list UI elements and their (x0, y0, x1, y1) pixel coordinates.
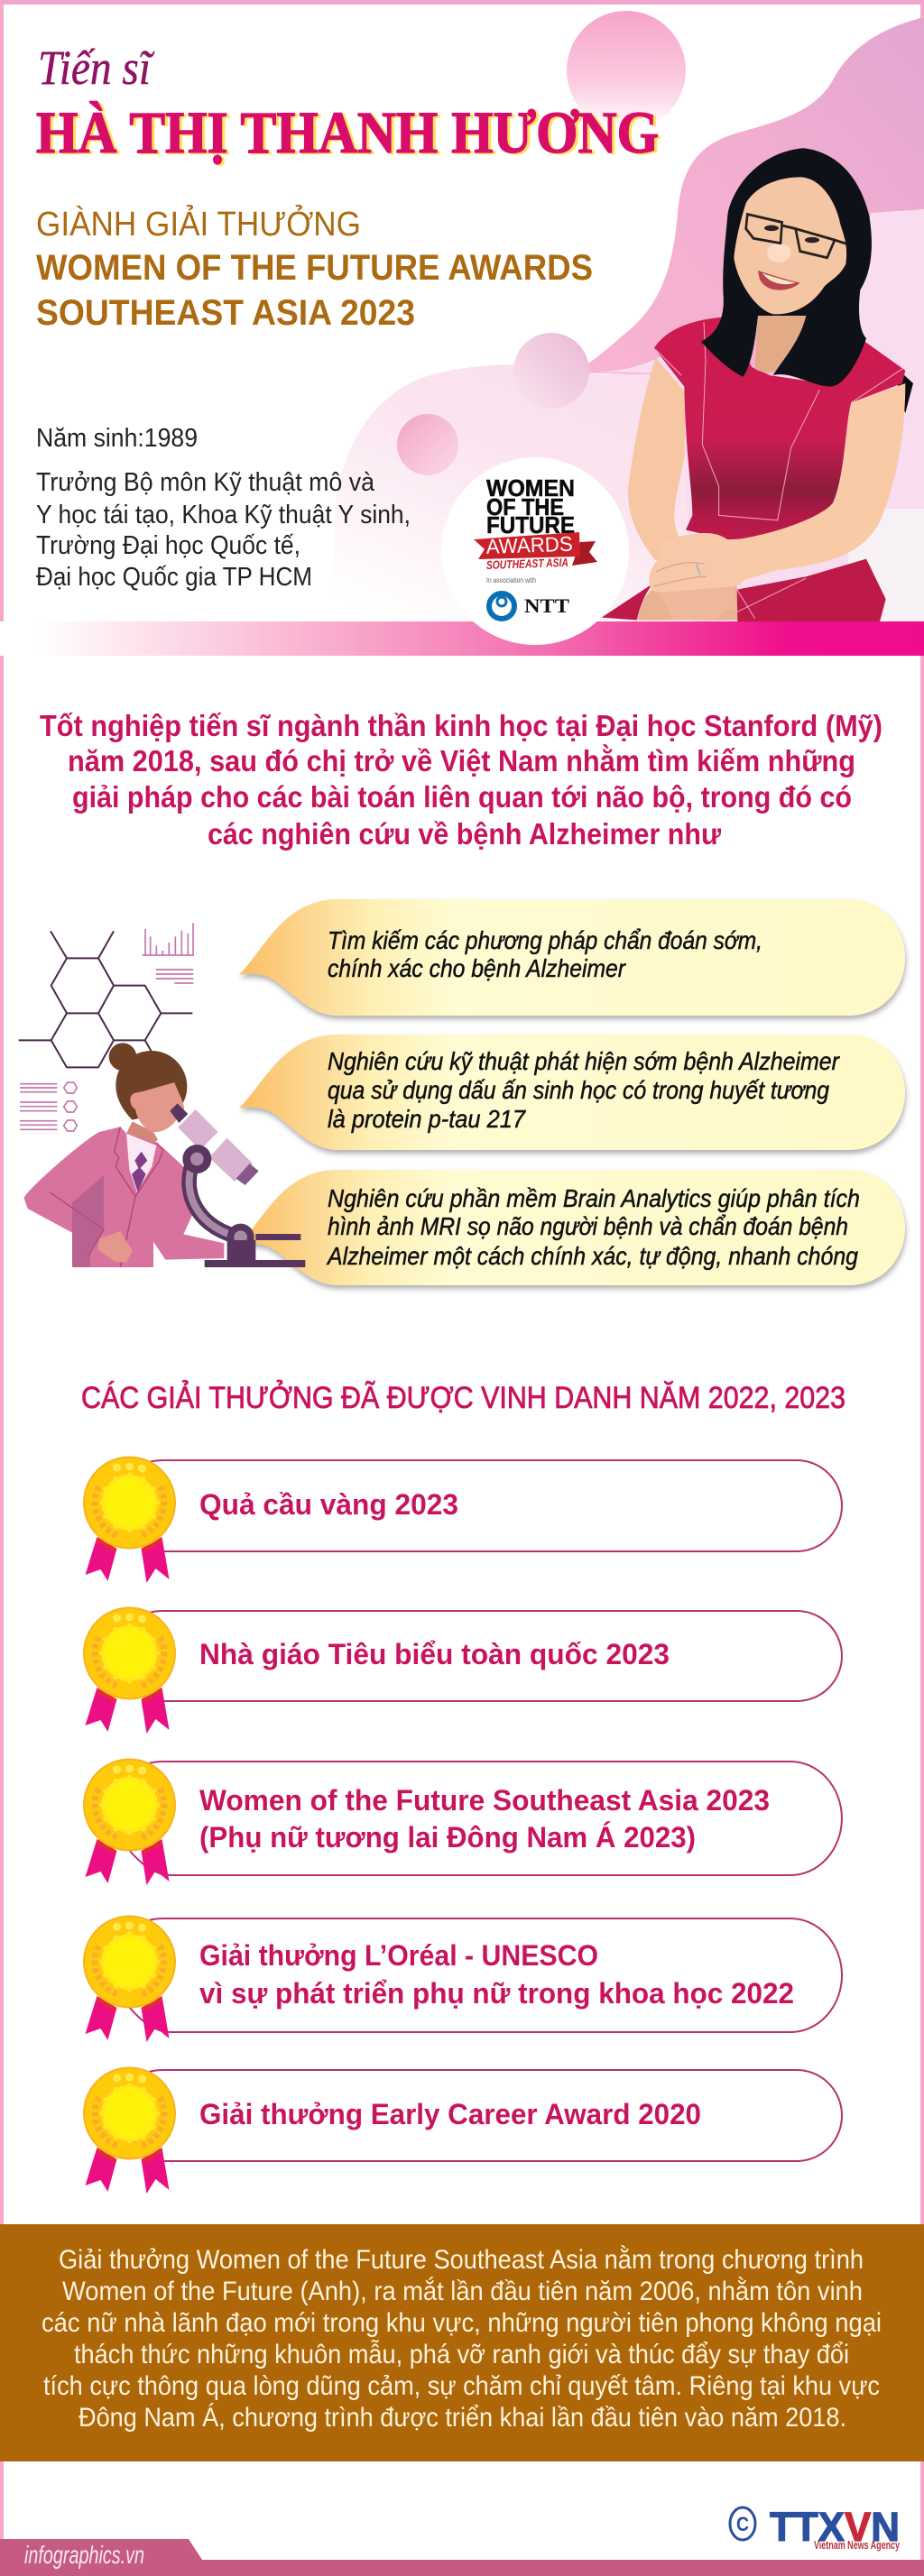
biography text: Trường Đại học Quốc tế, (36, 531, 300, 560)
biography text: Trưởng Bộ môn Kỹ thuật mô và (36, 468, 375, 497)
panel: about the award: Đông Nam Á, chương trình được triển khai lần đầu tiên vào năm 2018. (79, 2403, 846, 2433)
callout 3: Alzheimer một cách chính xác, tự động, nhanh chóng (326, 1242, 858, 1270)
logo: Women of the Future Awards (441, 457, 629, 645)
callout 2 (239, 1035, 905, 1150)
footer band (0, 2539, 924, 2576)
award 2 (83, 1607, 842, 1734)
intro text: các nghiên cứu về bệnh Alzheimer như (208, 817, 721, 851)
panel: about the award: Women of the Future (Anh), ra mắt lần đầu tiên năm 2006, nhằm tôn vinh (62, 2277, 863, 2306)
photo: Dr Ha Thi Thanh Huong (602, 148, 913, 621)
heading: award name: WOMEN OF THE FUTURE AWARDS (36, 248, 593, 288)
logo: Women of the Future Awards: AWARDS (485, 532, 573, 558)
panel: research callouts (239, 899, 905, 1285)
intro text: Tốt nghiệp tiến sĩ ngành thần kinh học tại Đại học Stanford (Mỹ) (40, 709, 882, 742)
background blobs (330, 11, 924, 631)
biography text: Đại học Quốc gia TP HCM (36, 563, 312, 592)
intro text: năm 2018, sau đó chị trở về Việt Nam nhằm tìm kiếm những (68, 744, 855, 777)
logo: TTXVN: C (736, 2513, 749, 2535)
award 3 (83, 1759, 842, 1885)
callout 3 (239, 1170, 905, 1285)
callout 2: Nghiên cứu kỹ thuật phát hiện sớm bệnh Alzheimer (328, 1047, 840, 1075)
microscope (170, 1103, 305, 1267)
award 1 (83, 1456, 842, 1583)
icon: mini bar chart (20, 923, 194, 1131)
callout 3: hình ảnh MRI sọ não người bệnh và chẩn đoán bệnh (328, 1212, 848, 1240)
award 3: Women of the Future Southeast Asia 2023 (199, 1784, 770, 1817)
heading: awards: CÁC GIẢI THƯỞNG ĐÃ ĐƯỢC VINH DANH NĂM 2022, 2023 (81, 1381, 845, 1415)
award 4 (83, 1916, 842, 2042)
logo: Women of the Future Awards: NTT (524, 594, 569, 617)
heading: award name: SOUTHEAST ASIA 2023 (36, 293, 415, 333)
award 1: Quả cầu vàng 2023 (199, 1488, 458, 1521)
heading: award name: GIÀNH GIẢI THƯỞNG (36, 204, 361, 244)
logo: Women of the Future Awards: FUTURE (486, 511, 575, 538)
award 4: Giải thưởng L’Oréal - UNESCO (199, 1939, 598, 1972)
logo: Women of the Future Awards: In association with (486, 576, 536, 584)
bottom gradient band (0, 621, 924, 656)
biography text (36, 424, 411, 592)
source: infographics.vn: infographics.vn (24, 2541, 144, 2569)
intro text: giải pháp cho các bài toán liên quan tới não bộ, trong đó có (72, 780, 852, 814)
award 5 (83, 2067, 842, 2194)
logo: Women of the Future Awards: SOUTHEAST ASIA (486, 556, 568, 572)
scientist figure (24, 1043, 224, 1267)
panel: about the award: Giải thưởng Women of the Future Southeast Asia nằm trong chương trình (59, 2245, 864, 2275)
award 3: (Phụ nữ tương lai Đông Nam Á 2023) (199, 1821, 696, 1854)
logo: TTXVN: TTXVN (770, 2504, 900, 2550)
award 2: Nhà giáo Tiêu biểu toàn quốc 2023 (199, 1638, 670, 1670)
title: name: HÀ THỊ THANH HƯƠNG (36, 100, 659, 166)
callout 1 (239, 899, 905, 1016)
icon: molecule hexagons (19, 931, 192, 1067)
callout 1: chính xác cho bệnh Alzheimer (328, 954, 626, 982)
intro text (40, 709, 882, 851)
callout 1: Tìm kiếm các phương pháp chẩn đoán sớm, (328, 926, 762, 954)
panel: about the award (0, 2224, 924, 2461)
biography text: Năm sinh:1989 (36, 424, 198, 453)
award 4: vì sự phát triển phụ nữ trong khoa học 2022 (199, 1977, 794, 2010)
panel: award list (83, 1456, 842, 2194)
logo: Women of the Future Awards: OF THE (486, 493, 564, 520)
callout 3: Nghiên cứu phần mềm Brain Analytics giúp phân tích (328, 1184, 860, 1212)
logo: Women of the Future Awards: WOMEN (486, 474, 575, 501)
award 5: Giải thưởng Early Career Award 2020 (199, 2098, 701, 2130)
callout 2: qua sử dụng dấu ấn sinh học có trong huyết tương (328, 1076, 829, 1104)
heading: award name (36, 204, 593, 333)
title: Tiến sĩ: Tiến sĩ (38, 41, 154, 95)
callout 2: là protein p-tau 217 (328, 1105, 526, 1133)
illustration: scientist with microscope (19, 923, 305, 1267)
biography text: Y học tái tạo, Khoa Kỹ thuật Y sinh, (36, 501, 411, 529)
panel: header (0, 11, 924, 656)
panel: about the award: thách thức những khuôn mẫu, phá vỡ ranh giới và thúc đẩy sự thay đổi (74, 2340, 849, 2369)
